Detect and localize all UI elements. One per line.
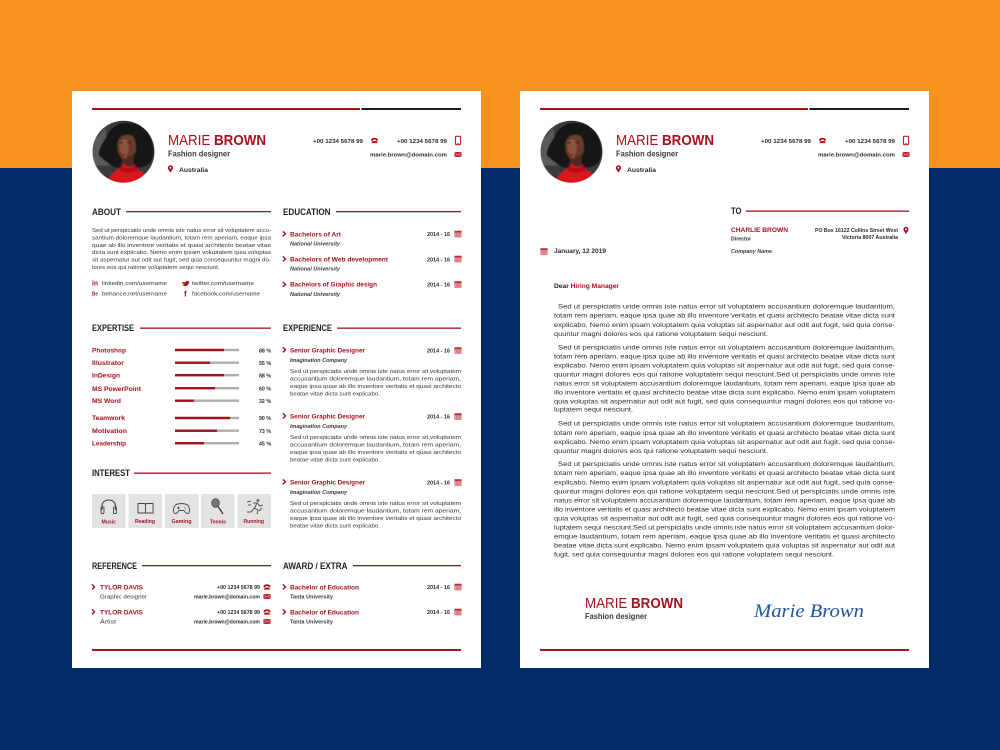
letter paragraph 3: Sed ut perspiciatis unde omnis iste natus error sit voluptatem accusantium doloremque laudantium,: [558, 421, 895, 428]
location: [616, 165, 656, 174]
skill bar: MS Word 32%: MS Word: [92, 398, 121, 405]
letter paragraph 4: quia voluptas sit aspernatur aut odit aut fugit, sed quia consequuntur magni dolores eos qui ratione vo-: [554, 515, 895, 522]
letter paragraph 4: natus error sit voluptatem accusantium doloremque laudantium, totam rem aperiam, eaque ipsa quae ab: [554, 497, 895, 504]
contact details: +00 1234 5678 99: [845, 139, 895, 145]
experience item 1: beatae vitae dicta sunt explicabo.: [290, 392, 380, 398]
letter paragraph 2: illo inventore veritatis et quasi architecto beatae vitae dicta sunt explicabo. Nemo enim ipsam voluptatem: [554, 390, 895, 396]
section: education: [283, 207, 462, 298]
recipient address: Victoria 8007 Australia: [842, 235, 898, 241]
skill bar: InDesign 88%: [92, 372, 272, 380]
education item 3: [283, 281, 462, 298]
panel: resume page: [72, 91, 481, 668]
skill bar: MS PowerPoint 60%: MS PowerPoint: [92, 386, 142, 393]
skill bar: MS Word 32%: [92, 398, 272, 405]
education item 2: [283, 256, 462, 273]
skill bar: InDesign 88%: 88 %: [259, 374, 272, 380]
section: about: [92, 207, 272, 298]
letter paragraph 3: totam rem aperiam, eaque ipsa quae ab illo inventore veritatis et quasi architecto beatae vitae dicta sunt: [554, 430, 895, 437]
skill bar: Motivation 73%: Motivation: [92, 428, 127, 435]
reference item 1: +00 1234 5678 99: [217, 585, 260, 591]
skill bar: Motivation 73%: 73 %: [259, 429, 272, 435]
letter paragraph 2: quia voluptas sit aspernatur aut odit aut fugit, sed quia consequuntur magni dolores eos qui ratione vo-: [554, 398, 895, 406]
letter paragraph 2: quuntur magni dolores eos qui ratione voluptatem sequi nesciunt.Sed ut perspiciatis unde omnis iste: [554, 372, 895, 379]
skill bar: MS PowerPoint 60%: [92, 386, 272, 393]
social links: in: [92, 280, 98, 288]
skill bar: MS PowerPoint 60%: 60 %: [259, 386, 272, 392]
bottom rule: [540, 649, 909, 651]
social links: Be: [92, 292, 98, 298]
letter paragraph 2: luptatem sequi nesciunt.: [554, 407, 633, 414]
section: interest: [92, 468, 271, 528]
letter paragraph 4: Sed ut perspiciatis unde omnis iste natus error sit voluptatem accusantium doloremque laudantium,: [558, 461, 895, 468]
skill bar: Illustrator 55%: 55 %: [259, 361, 272, 367]
award item 2: [283, 609, 462, 626]
contact details: +00 1234 5678 99: [397, 139, 447, 145]
reference item 1: marie.brown@domain.com: [194, 594, 260, 600]
experience item 3: Sed ut perspiciatis unde omnis iste natus error sit voluptatem: [290, 501, 461, 507]
interest tile: running: [238, 494, 271, 528]
interest tile: music: Music: [102, 520, 116, 526]
reference item 1: [92, 584, 271, 601]
letter paragraph 2: natus error sit voluptatem accusantium doloremque laudantium, totam rem aperiam, eaque ipsa quae ab: [554, 381, 895, 388]
section: reference: [92, 561, 271, 626]
background: navy band: [0, 168, 1000, 750]
portrait photo: [538, 119, 604, 185]
skill bar: Teamwork 90%: [92, 415, 272, 422]
letter paragraph 1: totam rem aperiam, eaque ipsa quae ab illo inventore veritatis et quasi architecto beatae vitae dicta sunt: [554, 313, 895, 320]
letter paragraph 2: [554, 344, 895, 414]
interest tile: music: [92, 494, 126, 528]
about text: [92, 228, 272, 271]
portrait photo: [90, 119, 156, 185]
contact details: marie.brown@domain.com: [370, 152, 447, 158]
award heading: AWARD / EXTRA: [283, 561, 348, 571]
experience item 1: accusantium doloremque laudantium, totam rem aperiam,: [290, 377, 462, 383]
reference item 1: Graphic designer: [100, 595, 147, 601]
top rule: [92, 108, 461, 110]
letter paragraph 4: luptatem sequi nesciunt.Sed ut perspiciatis unde omnis iste natus error sit voluptatem accusantium dolor-: [554, 524, 895, 531]
contact details: [761, 136, 910, 158]
letter paragraph 4: beatae vitae dicta sunt explicabo. Nemo enim ipsam voluptatem quia voluptas sit aspernatur aut odit aut: [554, 542, 895, 549]
contact details: +00 1234 5678 99: [761, 139, 811, 145]
letter paragraph 3: quuntur magni dolores eos qui ratione voluptatem sequi nesciunt.: [554, 448, 768, 455]
education item 2: 2014 - 16: [427, 257, 450, 263]
recipient name: Company Name: [731, 249, 772, 255]
section: expertise: [92, 323, 272, 448]
letter paragraph 1: Sed ut perspiciatis unde omnis iste natus error sit voluptatem accusantium doloremque laudantium,: [558, 303, 895, 310]
experience item 3: [283, 479, 462, 530]
award item 1: Tanta University: [290, 595, 333, 601]
experience item 2: Sed ut perspiciatis unde omnis iste natus error sit voluptatem: [290, 435, 461, 441]
social links: facebook.com/username: [192, 292, 260, 298]
about heading: ABOUT: [92, 207, 121, 217]
experience item 3: beatae vitae dicta sunt explicabo.: [290, 524, 380, 530]
experience item 2: 2014 - 16: [427, 414, 450, 420]
experience item 2: eaque ipsa quae ab illo inventore veritatis et quasi architecto: [290, 450, 461, 456]
letter date: January, 12 2019: [554, 248, 606, 255]
education item 1: Bachelors of Art: [290, 231, 342, 238]
location: Australia: [179, 167, 208, 174]
letter paragraph 4: explicabo. Nemo enim ipsam voluptatem quia voluptas sit aspernatur aut odit aut fugit, sed quia conse-: [554, 479, 895, 486]
skill bar: InDesign 88%: InDesign: [92, 372, 120, 380]
award item 2: Tanta University: [290, 620, 333, 626]
letter paragraph 2: totam rem aperiam, eaque ipsa quae ab illo inventore veritatis et quasi architecto beatae vitae dicta sunt: [554, 353, 895, 360]
interest tile: running: Running: [244, 519, 264, 525]
recipient name: CHARLIE BROWN: [731, 227, 788, 234]
handwritten signature: Marie Brown: [753, 601, 864, 622]
skill bar: Photoshop 88%: 88 %: [259, 348, 272, 354]
skill bar: Teamwork 90%: 90 %: [259, 416, 272, 422]
experience item 3: 2014 - 16: [427, 480, 450, 486]
experience item 1: Sed ut perspiciatis unde omnis iste natus error sit voluptatem: [290, 369, 461, 375]
interest tile: tennis: Tennis: [210, 520, 226, 526]
job title: Fashion designer: [168, 150, 230, 158]
letter paragraph 1: quuntur magni dolores eos qui ratione voluptatem sequi nesciunt.: [554, 331, 768, 338]
skill bar: Leadership 45%: 45 %: [259, 442, 272, 448]
letter paragraph 2: Sed ut perspiciatis unde omnis iste natus error sit voluptatem accusantium doloremque laudantium,: [558, 344, 895, 351]
experience item 2: Senior Graphic Designer: [290, 414, 365, 421]
about text: quae ab illo inventore veritatis et quasi architecto beatae vitae: [92, 243, 271, 249]
letter paragraph 4: illo inventore veritatis et quasi architecto beatae vitae dicta sunt explicabo. Nemo enim ipsam voluptatem: [554, 506, 895, 513]
top rule: [540, 108, 909, 110]
education item 2: National University: [290, 267, 341, 273]
reference item 2: [92, 609, 271, 626]
section: experience: [283, 323, 462, 530]
about text: dicta sunt explicabo. Nemo enim ipsam voluptatem quia voluptas: [92, 250, 271, 256]
about text: Sed ut perspiciatis unde omnis iste natus error sit voluptatem accu-: [92, 228, 271, 234]
experience item 2: beatae vitae dicta sunt explicabo.: [290, 458, 380, 464]
recipient block: [731, 206, 909, 255]
education item 3: 2014 - 16: [427, 282, 450, 288]
letter paragraph 4: emque laudantium, totam rem aperiam, eaque ipsa quae ab illo inventore veritatis et quasi architecto: [554, 533, 895, 540]
section: award / extra: [283, 561, 462, 626]
skill bar: Teamwork 90%: Teamwork: [92, 415, 125, 422]
experience item 1: [283, 347, 462, 398]
social links: twitter.com/username: [192, 281, 254, 287]
skill bar: Motivation 73%: [92, 428, 272, 435]
award item 1: [283, 584, 462, 601]
education item 1: National University: [290, 242, 341, 248]
about text: santium doloremque laudantium, totam rem aperiam, eaque ipsa: [92, 236, 272, 242]
experience item 3: accusantium doloremque laudantium, totam rem aperiam,: [290, 509, 462, 515]
letter paragraph 2: explicabo. Nemo enim ipsam voluptatem quia voluptas sit aspernatur aut odit aut fugit, sed quia conse-: [554, 362, 895, 369]
experience item 3: eaque ipsa quae ab illo inventore veritatis et quasi architecto: [290, 516, 461, 522]
interest tile: gaming: [165, 494, 198, 528]
education item 2: Bachelors of Web development: [290, 256, 389, 264]
experience item 2: [283, 413, 462, 464]
education heading: EDUCATION: [283, 207, 330, 217]
recipient address: [815, 227, 909, 241]
background: orange band: [0, 0, 1000, 168]
skill bar: Leadership 45%: [92, 440, 272, 448]
award item 2: 2014 - 16: [427, 610, 450, 616]
letter paragraph 1: [554, 303, 895, 338]
award item 2: Bachelor of Education: [290, 610, 359, 616]
panel: cover letter page: [520, 91, 929, 668]
education item 1: 2014 - 16: [427, 232, 450, 238]
skill bar: Illustrator 55%: Illustrator: [92, 360, 124, 367]
location: [168, 165, 208, 174]
experience item 3: Imagination Company: [290, 490, 348, 496]
experience item 1: Imagination Company: [290, 358, 348, 364]
reference item 2: TYLOR DAVIS: [100, 610, 143, 616]
experience item 2: accusantium doloremque laudantium, totam rem aperiam,: [290, 443, 462, 449]
interest heading: INTEREST: [92, 468, 130, 478]
education item 3: Bachelors of Graphic design: [290, 282, 377, 289]
recipient name: Director: [731, 236, 751, 242]
reference item 2: marie.brown@domain.com: [194, 619, 260, 625]
skill bar: MS Word 32%: 32 %: [259, 399, 272, 405]
letter paragraph 4: quuntur magni dolores eos qui ratione voluptatem sequi nesciunt.Sed ut perspiciatis unde omnis iste: [554, 488, 895, 495]
interest tile: reading: Reading: [135, 519, 155, 525]
name heading: MARIE BROWN: [616, 133, 714, 149]
social links: behance.net/username: [102, 292, 167, 298]
skill bar: Illustrator 55%: [92, 360, 272, 367]
bottom rule: [92, 649, 461, 651]
reference item 1: TYLOR DAVIS: [100, 584, 143, 592]
sign-off name: Fashion designer: [585, 612, 647, 621]
to heading: TO: [731, 206, 742, 216]
education item 1: [283, 231, 462, 248]
skill bar: Leadership 45%: Leadership: [92, 440, 126, 448]
experience heading: EXPERIENCE: [283, 323, 332, 333]
experience item 1: eaque ipsa quae ab illo inventore veritatis et quasi architecto: [290, 384, 461, 390]
social links: f: [184, 290, 187, 298]
letter paragraph 3: [554, 421, 895, 455]
reference item 2: Artist: [100, 620, 116, 626]
about text: sit aspernatur aut odit aut fugit, sed quia consequuntur magni do-: [92, 258, 271, 264]
contact details: [313, 136, 462, 158]
name heading: MARIE BROWN: [168, 133, 266, 149]
interest tile: gaming: Gaming: [172, 519, 192, 525]
letter paragraph 4: totam rem aperiam, eaque ipsa quae ab illo inventore veritatis et quasi architecto beatae vitae dicta sunt: [554, 470, 895, 477]
education item 3: National University: [290, 292, 341, 298]
letter paragraph 3: explicabo. Nemo enim ipsam voluptatem quia voluptas sit aspernatur aut odit aut fugit, sed quia conse-: [554, 439, 895, 446]
social links: linkedin.com/username: [102, 281, 167, 287]
experience item 3: Senior Graphic Designer: [290, 480, 365, 487]
sign-off name: MARIE BROWN: [585, 596, 683, 612]
experience item 1: Senior Graphic Designer: [290, 348, 365, 355]
recipient address: PO Box 16122 Collins Street West: [815, 228, 898, 234]
interest tile: reading: [128, 494, 162, 528]
about text: lores eos qui ratione voluptatem sequi nesciunt.: [92, 265, 220, 271]
expertise heading: EXPERTISE: [92, 323, 134, 333]
award item 1: Bachelor of Education: [290, 584, 359, 592]
contact details: +00 1234 5678 99: [313, 139, 363, 145]
award item 1: 2014 - 16: [427, 585, 450, 591]
interest tile: tennis: [201, 494, 234, 528]
salutation: Dear Hiring Manager: [554, 283, 619, 290]
experience item 1: 2014 - 16: [427, 348, 450, 354]
letter paragraph 4: fugit, sed quia consequuntur magni dolores eos qui ratione voluptatem sequi nesciunt.: [554, 551, 834, 558]
letter paragraph 4: [554, 461, 895, 558]
reference heading: REFERENCE: [92, 561, 137, 571]
job title: Fashion designer: [616, 150, 678, 158]
recipient name: [731, 227, 788, 255]
skill bar: Photoshop 88%: Photoshop: [92, 347, 126, 354]
letter paragraph 1: explicabo. Nemo enim ipsam voluptatem quia voluptas sit aspernatur aut odit aut fugit, sed quia conse-: [554, 322, 895, 329]
reference item 2: +00 1234 5678 99: [217, 610, 260, 616]
experience item 2: Imagination Company: [290, 424, 348, 430]
skill bar: Photoshop 88%: [92, 347, 272, 354]
location: Australia: [627, 167, 656, 174]
sign-off name: [585, 596, 683, 621]
contact details: marie.brown@domain.com: [818, 152, 895, 158]
social links: [92, 280, 260, 298]
